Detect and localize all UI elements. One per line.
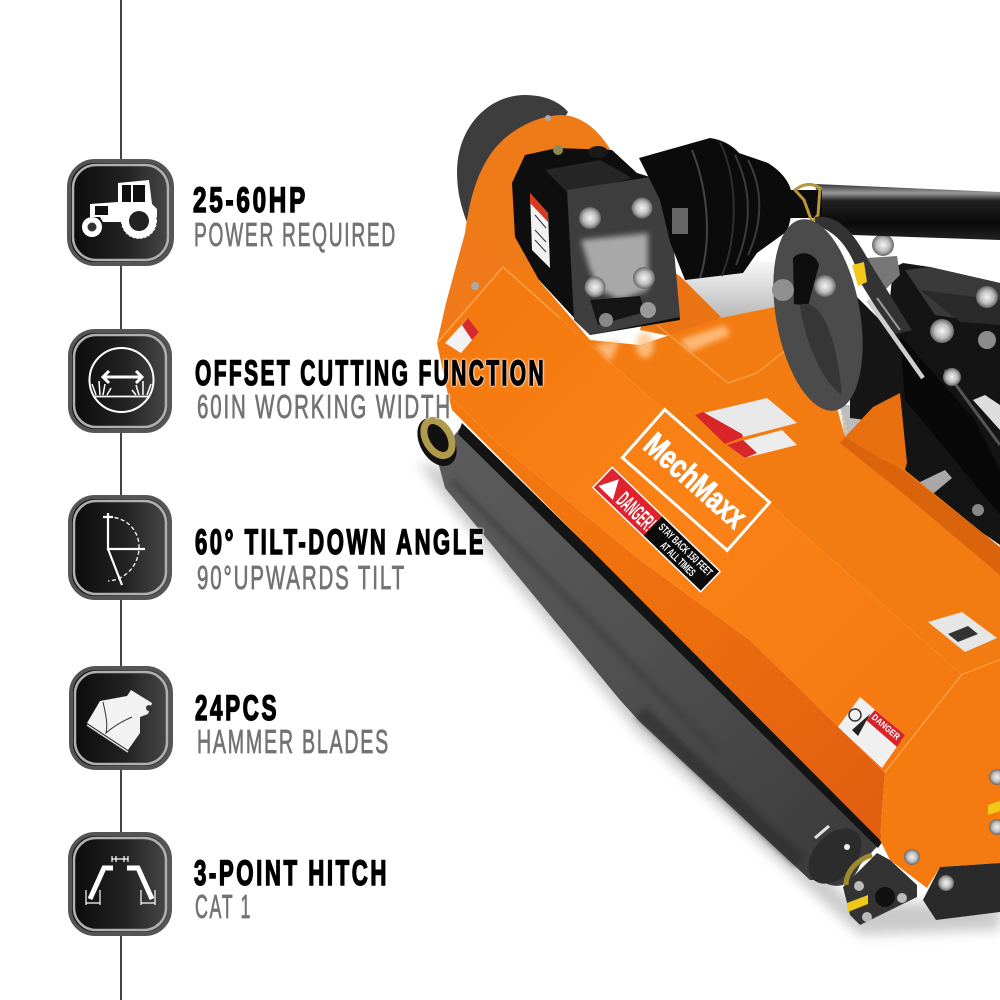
main face — [437, 267, 962, 773]
timeline vertical line — [120, 0, 122, 1000]
danger decal: AT ALL TIMES — [658, 540, 698, 579]
mounting bracket — [567, 176, 680, 335]
PTO rubber boot — [639, 138, 822, 280]
feature 2 icon: working width — [70, 331, 170, 431]
roller — [409, 411, 885, 894]
end bracket — [843, 853, 1000, 925]
feature 1 icon: tractor — [69, 161, 172, 264]
gloss highlights — [595, 325, 730, 362]
orange lower housing bracket — [845, 393, 907, 470]
gearbox — [512, 145, 680, 335]
feature 5 icon: 3-point hitch — [70, 834, 170, 934]
feature 3 subtext: 90°UPWARDS TILT — [197, 559, 406, 596]
danger sticker: lower right — [838, 697, 905, 768]
ground shadow — [418, 462, 1000, 935]
orange rear strip — [640, 262, 721, 340]
MechMaxx logo — [622, 410, 770, 550]
left upper face — [437, 233, 503, 343]
lift disc — [760, 212, 923, 425]
feature 5 heading: 3-POINT HITCH — [194, 854, 389, 893]
fold highlights — [437, 267, 1000, 773]
product image: flail mower — [409, 95, 1000, 935]
upper face — [503, 267, 1000, 675]
ID plate sticker — [928, 612, 997, 652]
warning sticker: top left — [445, 318, 479, 353]
warning decals: top centre — [695, 398, 797, 458]
dark ridge strip — [840, 437, 1000, 575]
feature 2 heading: OFFSET CUTTING FUNCTION — [195, 354, 546, 393]
PTO driveshaft — [815, 184, 1000, 240]
end plate — [880, 660, 1000, 888]
feature 5 subtext: CAT 1 — [195, 888, 252, 925]
background gray behind housing — [680, 262, 805, 325]
danger decal: STAY BACK 150 FEET — [656, 522, 715, 579]
danger sticker: lower right: DANGER — [870, 712, 902, 742]
danger decal: DANGER! — [612, 487, 661, 536]
plate bolts — [471, 115, 1000, 891]
feature 4 heading: 24PCS — [195, 689, 279, 728]
orange side plate — [465, 115, 640, 280]
MechMaxx logo: MechMaxx — [637, 425, 755, 536]
feature 1 heading: 25-60HP — [193, 181, 308, 220]
feature 3 icon: tilt angle — [70, 497, 170, 598]
gray windows behind frame — [840, 405, 945, 500]
feature 2 subtext: 60IN WORKING WIDTH — [197, 388, 452, 425]
warning label on gearbox — [530, 193, 550, 268]
danger decal — [593, 467, 720, 592]
right hitch assembly dark parts — [866, 234, 1000, 545]
lower face — [448, 395, 885, 840]
safety chain — [795, 184, 820, 222]
feature 4 icon: hammer blade — [71, 668, 171, 768]
rear drum — [457, 95, 568, 240]
feature 4 subtext: HAMMER BLADES — [197, 723, 390, 760]
feature 1 subtext: POWER REQUIRED — [194, 216, 397, 253]
feature 3 heading: 60° TILT-DOWN ANGLE — [195, 523, 486, 562]
orange mower body — [437, 233, 1000, 888]
